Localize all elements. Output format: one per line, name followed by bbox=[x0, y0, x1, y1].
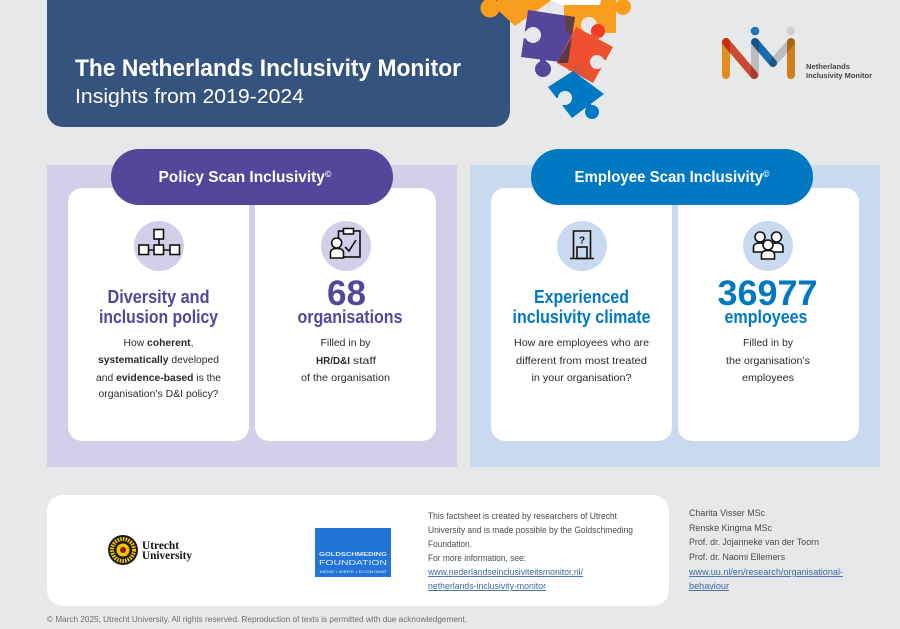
panel: employee scan bbox=[470, 149, 880, 467]
card: diversity and inclusion policy: and evidence-based is the bbox=[96, 373, 221, 384]
factsheet text: University and is made possible by the Goldschmeding bbox=[428, 525, 633, 535]
logo: Utrecht University bbox=[108, 535, 192, 565]
pill: policy scan heading: Policy Scan Inclusivity bbox=[158, 169, 326, 186]
card: experienced inclusivity climate: ? bbox=[579, 236, 585, 246]
card: experienced inclusivity climate: Experienced bbox=[534, 287, 629, 307]
card: 36977 employees: employees bbox=[742, 373, 794, 384]
card: diversity and inclusion policy: organisation’s D&I policy? bbox=[98, 389, 219, 400]
card: diversity and inclusion policy: Diversity and bbox=[108, 287, 210, 307]
card: 36977 employees: the organisation’s bbox=[726, 356, 810, 367]
header banner bbox=[47, 0, 510, 127]
card: experienced inclusivity climate: How are employees who are bbox=[514, 338, 649, 349]
logo: Goldschmeding Foundation bbox=[315, 528, 391, 577]
card: experienced inclusivity climate: inclusivity climate bbox=[512, 307, 650, 327]
logo: Goldschmeding Foundation: GOLDSCHMEDING bbox=[319, 552, 387, 558]
card: 68 organisations: Filled in by bbox=[320, 338, 370, 349]
logo: Netherlands Inclusivity Monitor bbox=[726, 27, 872, 80]
card: 36977 employees bbox=[678, 188, 859, 441]
card: diversity and inclusion policy bbox=[68, 188, 249, 441]
card: diversity and inclusion policy: systematically developed bbox=[98, 355, 219, 366]
pill: policy scan heading: © bbox=[325, 169, 332, 179]
panel: policy scan bbox=[47, 149, 457, 467]
pill: employee scan heading bbox=[531, 149, 813, 205]
factsheet text: For more information, see: bbox=[428, 553, 526, 563]
card: 36977 employees: employees bbox=[724, 307, 808, 327]
card: 36977 employees: Filled in by bbox=[743, 338, 793, 349]
card: experienced inclusivity climate: in your organisation? bbox=[532, 373, 632, 384]
pill: employee scan heading: Employee Scan Inclusivity bbox=[574, 169, 769, 186]
factsheet text: netherlands-inclusivity-monitor bbox=[428, 581, 546, 591]
pill: policy scan heading bbox=[111, 149, 393, 205]
card: experienced inclusivity climate: different from most treated bbox=[516, 356, 647, 367]
card: diversity and inclusion policy: inclusion policy bbox=[99, 307, 218, 327]
authors text: Charita Visser MSc bbox=[689, 508, 765, 518]
authors text: Prof. dr. Jojanneke van der Toorn bbox=[689, 537, 819, 547]
factsheet text bbox=[427, 511, 633, 591]
card: 68 organisations: staff bbox=[353, 356, 376, 367]
authors text bbox=[688, 508, 843, 591]
card: experienced inclusivity climate bbox=[491, 188, 672, 441]
card: 68 organisations: 68 bbox=[327, 274, 366, 313]
footer card bbox=[47, 495, 669, 606]
logo: Utrecht University: University bbox=[142, 550, 192, 562]
factsheet text: This factsheet is created by researchers of Utrecht bbox=[428, 511, 617, 521]
puzzle pieces illustration bbox=[480, 0, 631, 119]
authors text: behaviour bbox=[689, 581, 729, 591]
logo: Goldschmeding Foundation: MENS • WERK • ECONOMIE bbox=[320, 569, 387, 574]
card: 68 organisations: of the organisation bbox=[301, 373, 390, 384]
factsheet text: www.nederlandseinclusiviteitsmonitor.nl/ bbox=[427, 567, 583, 577]
logo: Netherlands Inclusivity Monitor: Inclusivity Monitor bbox=[806, 71, 872, 80]
card: 68 organisations bbox=[255, 188, 436, 441]
subtitle: Insights from 2019-2024 bbox=[75, 86, 304, 108]
logo: Goldschmeding Foundation: FOUNDATION bbox=[319, 558, 387, 567]
pill: employee scan heading: © bbox=[763, 169, 770, 179]
authors text: Renske Kingma MSc bbox=[689, 523, 772, 533]
copyright line: © March 2025, Utrecht University. All rights reserved. Reproduction of texts is permitted with due acknowledgement. bbox=[47, 614, 467, 624]
card: diversity and inclusion policy: How coherent, bbox=[124, 338, 194, 349]
authors text: www.uu.nl/en/research/organisational- bbox=[688, 567, 843, 577]
authors text: Prof. dr. Naomi Ellemers bbox=[689, 552, 785, 562]
card: 36977 employees: 36977 bbox=[718, 274, 818, 313]
logo: Utrecht University: Utrecht bbox=[142, 540, 179, 552]
factsheet text: Foundation. bbox=[428, 539, 472, 549]
card: 68 organisations: HR/D&I bbox=[316, 356, 350, 367]
title: The Netherlands Inclusivity Monitor bbox=[75, 55, 461, 82]
logo: Netherlands Inclusivity Monitor: Netherlands bbox=[806, 62, 850, 71]
card: 68 organisations: organisations bbox=[298, 307, 402, 327]
